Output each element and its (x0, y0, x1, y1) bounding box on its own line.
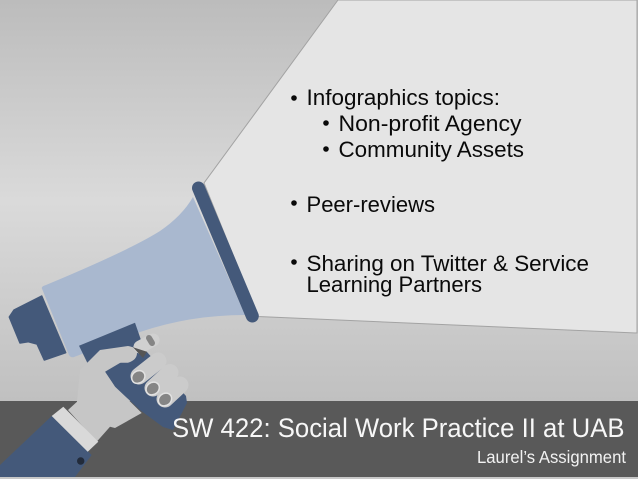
little finger (156, 385, 180, 409)
shirt cuff (52, 407, 98, 452)
handle top block (79, 323, 141, 363)
bullet: Peer-reviews: Peer-reviews (306, 192, 435, 217)
bullet list (291, 85, 589, 297)
cufflink (77, 457, 84, 465)
bullet: Sharing on Twitter and Service Learning Partners: Sharing on Twitter & Service (306, 251, 589, 276)
bullet: Community Assets: Community Assets (338, 137, 524, 162)
footer band (0, 401, 638, 477)
bullet: Sharing on Twitter and Service Learning Partners: Learning Partners (306, 272, 482, 297)
title: SW 422: Social Work Practice II at UAB (172, 413, 624, 443)
bullet: Sharing on Twitter and Service Learning Partners (291, 251, 589, 297)
subtitle: Laurel’s Assignment (477, 447, 626, 467)
thumb tip shadow (133, 347, 147, 358)
sleeve (0, 416, 92, 477)
hand and thumb (68, 346, 142, 442)
icon: megaphone held in hand (0, 188, 252, 477)
megaphone rim (198, 188, 252, 316)
bullet: Non-profit Agency: Non-profit Agency (338, 111, 522, 136)
middle finger (129, 361, 158, 386)
bullet: Infographics topics: Infographics topics: (306, 85, 500, 110)
megaphone horn (42, 197, 245, 357)
handle grip (105, 347, 187, 430)
megaphone back cap (9, 296, 66, 360)
index finger (140, 338, 153, 347)
light beam panel (204, 0, 637, 333)
ring finger (143, 372, 170, 398)
